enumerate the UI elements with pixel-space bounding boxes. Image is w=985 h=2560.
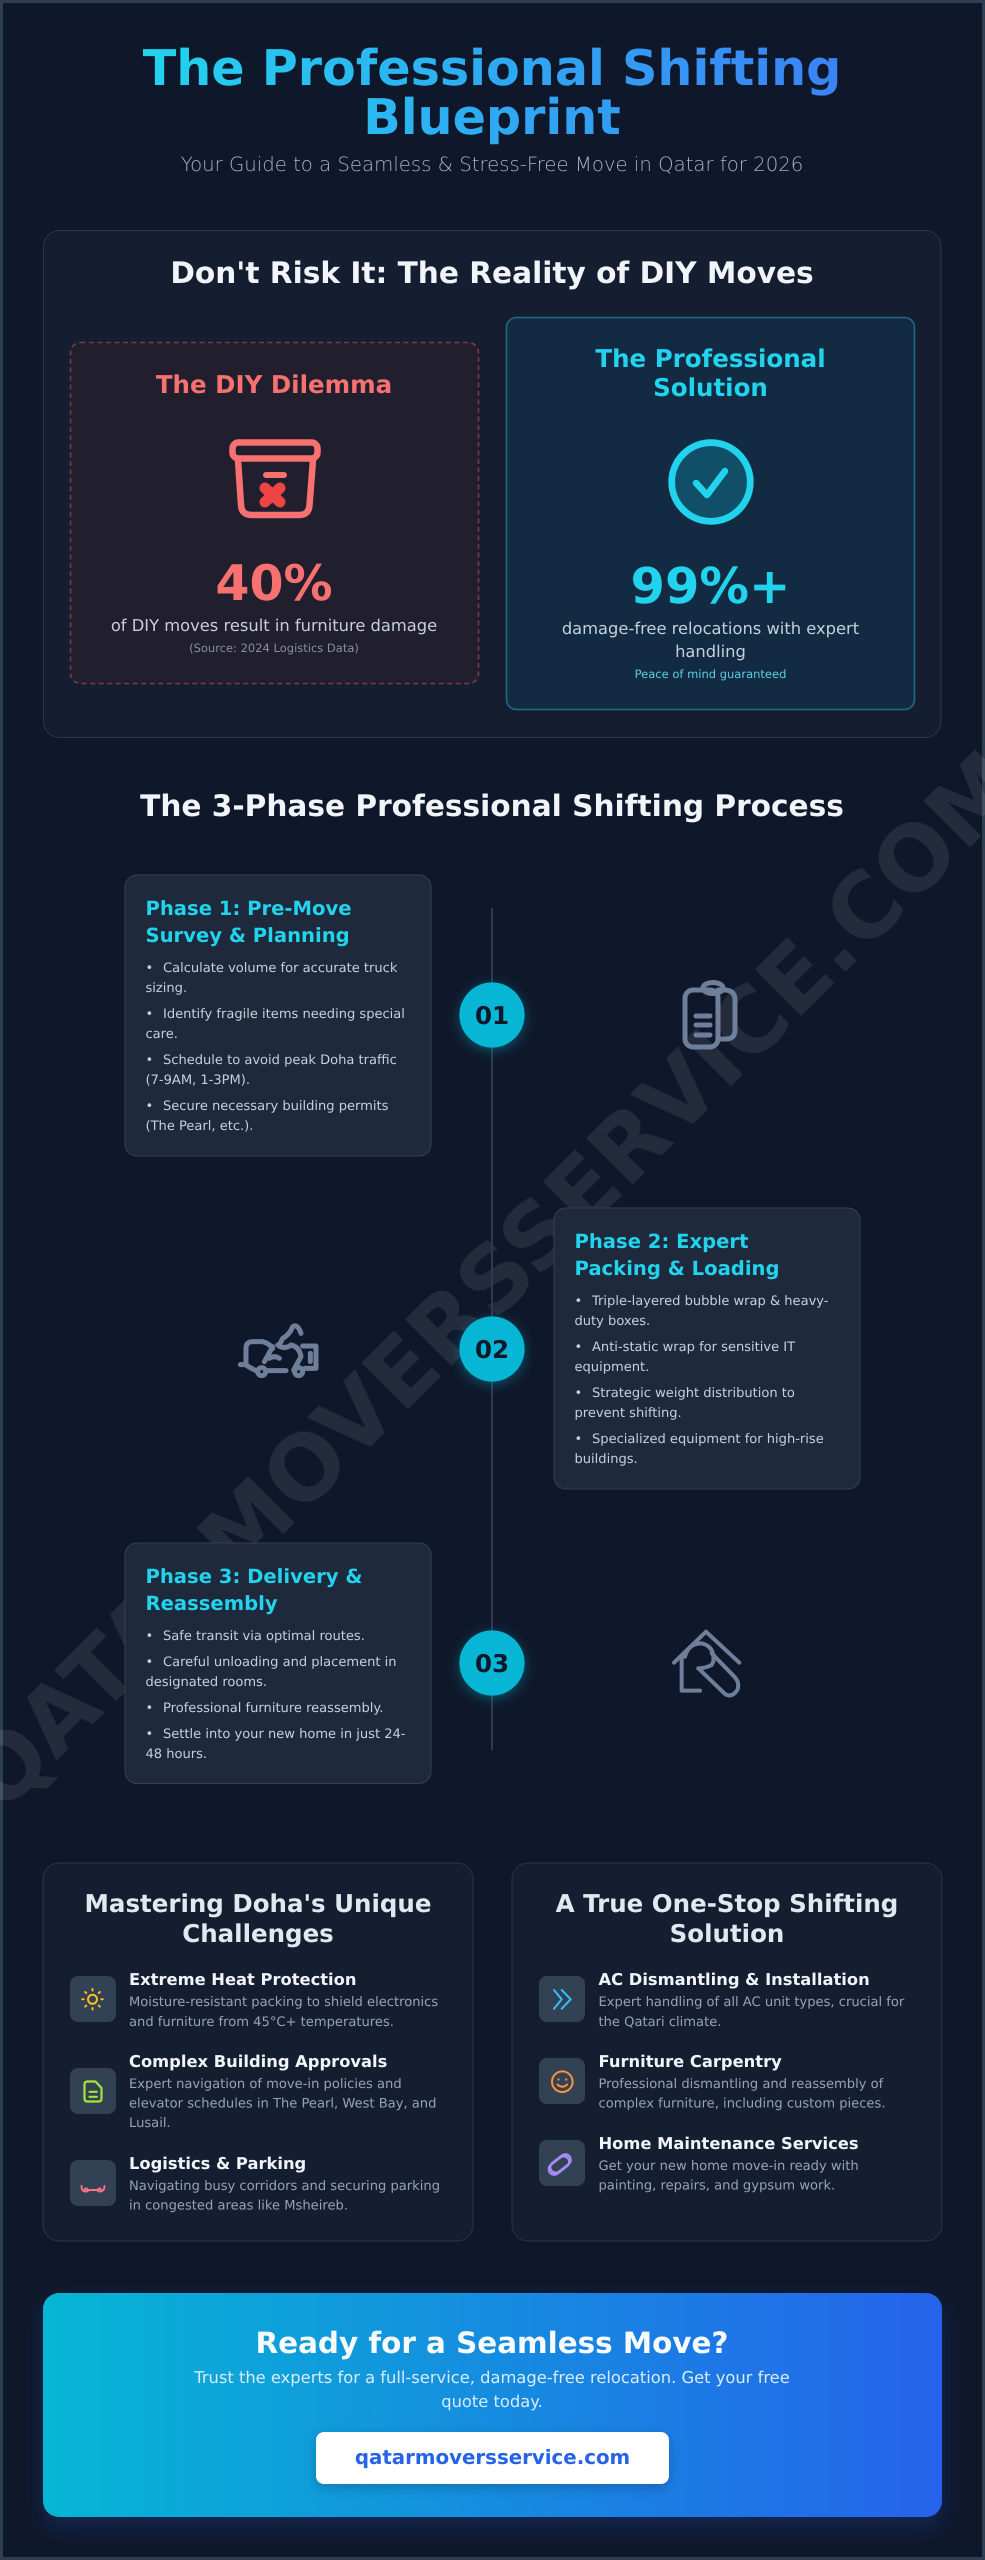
icon: check circle	[672, 443, 750, 521]
heading: challenges: Mastering Doha's Unique	[85, 1889, 431, 1918]
number badge 02	[459, 1316, 525, 1385]
item: furniture carpentry: Furniture Carpentry	[598, 2052, 782, 2071]
heading: one-stop: A True One-Stop Shifting	[556, 1889, 898, 1918]
call to action banner	[43, 2293, 942, 2527]
CTA heading: Ready for a Seamless Move?	[256, 2326, 728, 2360]
DIY heading: The DIY Dilemma	[156, 370, 392, 399]
card: professional solution	[506, 318, 914, 710]
item: heat protection: Extreme Heat Protection	[129, 1970, 356, 1989]
card: phase 1: Identify fragile items needing special	[163, 1007, 405, 1022]
title: Blueprint	[363, 88, 621, 146]
card: phase 3: •	[146, 1629, 153, 1644]
stat: 99%+: 99%+	[631, 557, 790, 615]
item: AC services	[539, 1970, 905, 2030]
card: phase 3: Professional furniture reassembly.	[163, 1701, 383, 1716]
stat description: damage-free relocations with expert	[562, 619, 859, 638]
card: phase 2: Packing & Loading	[574, 1257, 780, 1280]
item: home maintenance: Home Maintenance Services	[598, 2134, 859, 2153]
card: phase 2: duty boxes.	[574, 1314, 650, 1329]
card: phase 3: Reassembly	[146, 1592, 278, 1615]
card: phase 2: Anti-static wrap for sensitive IT	[592, 1340, 795, 1355]
card: phase 1: (The Pearl, etc.).	[146, 1119, 253, 1134]
number badge 01: 01	[475, 1001, 509, 1030]
heading: reality of DIY moves: Don't Risk It: The Reality of DIY Moves	[170, 256, 814, 290]
professional heading: Solution	[653, 373, 768, 402]
stat: 40%: 40%	[215, 555, 333, 612]
heading: challenges: Challenges	[182, 1919, 334, 1948]
card: phase 3: •	[146, 1701, 153, 1716]
card: phase 2: •	[574, 1294, 582, 1309]
card: phase 1: •	[146, 961, 153, 976]
card: phase 3: Careful unloading and placement in	[163, 1655, 397, 1670]
card: phase 1: Calculate volume for accurate truck	[163, 961, 398, 976]
card: phase 2: equipment.	[574, 1360, 649, 1375]
item: AC services: AC Dismantling & Installation	[598, 1970, 870, 1989]
item: furniture carpentry: Professional dismantling and reassembly of	[598, 2077, 884, 2092]
card: phase 3: 48 hours.	[146, 1747, 207, 1762]
header	[143, 39, 841, 176]
card: phase 1: Secure necessary building permits	[163, 1099, 389, 1114]
number badge 03: 03	[475, 1649, 509, 1678]
guarantee note: Peace of mind guaranteed	[635, 667, 786, 681]
panel: Doha challenges	[43, 1863, 473, 2241]
card: phase 3: •	[146, 1727, 153, 1742]
card: phase 1: •	[146, 1099, 153, 1114]
icon: truck	[240, 1326, 316, 1376]
item: logistics and parking: Navigating busy corridors and securing parking	[129, 2179, 440, 2194]
card: phase 3: Safe transit via optimal routes.	[163, 1629, 365, 1644]
phase 3	[125, 1543, 739, 1784]
card: phase 2	[554, 1208, 860, 1489]
item: building approvals: Lusail.	[129, 2116, 171, 2131]
item: building approvals: elevator schedules in The Pearl, West Bay, and	[129, 2097, 436, 2112]
panel: one-stop solution	[512, 1863, 942, 2241]
card: phase 2: Specialized equipment for high-rise	[592, 1432, 824, 1447]
source note: (Source: 2024 Logistics Data)	[189, 641, 359, 655]
number badge 01	[459, 982, 525, 1051]
CTA button: qatarmoversservice.com	[355, 2446, 630, 2469]
phase 1	[125, 875, 735, 1156]
number badge 02: 02	[475, 1335, 509, 1364]
icon: damaged box	[232, 442, 318, 515]
card: phase 2: Strategic weight distribution to	[592, 1386, 795, 1401]
card: phase 1: sizing.	[146, 981, 187, 996]
item: AC services: the Qatari climate.	[598, 2015, 721, 2030]
card: phase 1: (7-9AM, 1-3PM).	[146, 1073, 250, 1088]
title: The Professional Shifting	[143, 39, 841, 97]
card: phase 3	[125, 1543, 431, 1784]
item: heat protection: Moisture-resistant packing to shield electronics	[129, 1995, 438, 2010]
icon: clipboard	[685, 982, 735, 1047]
item: AC services: Expert handling of all AC unit types, crucial for	[598, 1995, 905, 2010]
card: phase 3: •	[146, 1655, 153, 1670]
item: logistics and parking	[70, 2154, 440, 2214]
item: building approvals	[70, 2052, 436, 2131]
phase 2	[240, 1208, 860, 1489]
stat description: handling	[675, 642, 746, 661]
card: phase 2: •	[574, 1386, 582, 1401]
card: phase 2: buildings.	[574, 1452, 638, 1467]
item: logistics and parking: Logistics & Parking	[129, 2154, 306, 2173]
card: DIY dilemma	[70, 342, 478, 684]
card: phase 3: designated rooms.	[146, 1675, 267, 1690]
timeline line	[491, 908, 493, 1750]
item: logistics and parking: in congested areas like Msheireb.	[129, 2199, 348, 2214]
number badge 03	[459, 1630, 525, 1699]
item: building approvals: Complex Building Approvals	[129, 2052, 387, 2071]
item: heat protection	[70, 1970, 438, 2030]
card: phase 1: care.	[146, 1027, 178, 1042]
item: home maintenance: painting, repairs, and gypsum work.	[598, 2179, 835, 2194]
item: home maintenance	[539, 2134, 859, 2194]
card: phase 3: Settle into your new home in just 24-	[163, 1727, 406, 1742]
card: phase 1: •	[146, 1053, 153, 1068]
heading: process: The 3-Phase Professional Shifting Process	[140, 789, 844, 823]
card: phase 2: Phase 2: Expert	[574, 1230, 748, 1253]
card: phase 2: •	[574, 1340, 582, 1355]
CTA text: Trust the experts for a full-service, damage-free relocation. Get your free	[193, 2368, 790, 2387]
professional heading: The Professional	[595, 344, 826, 373]
item: furniture carpentry: complex furniture, including custom pieces.	[598, 2097, 885, 2112]
card: phase 1: Phase 1: Pre-Move	[146, 897, 352, 920]
card: phase 2: •	[574, 1432, 582, 1447]
stat description: of DIY moves result in furniture damage	[111, 616, 437, 635]
card: phase 1: •	[146, 1007, 153, 1022]
CTA text: quote today.	[441, 2392, 543, 2411]
card: phase 1: Schedule to avoid peak Doha traffic	[163, 1053, 397, 1068]
card: phase 2: prevent shifting.	[574, 1406, 682, 1421]
item: home maintenance: Get your new home move-in ready with	[598, 2159, 859, 2174]
card: phase 1	[125, 875, 431, 1156]
subtitle: Your Guide to a Seamless & Stress-Free Move in Qatar for 2026	[181, 153, 803, 176]
card: phase 1: Survey & Planning	[146, 924, 350, 947]
panel: DIY vs professional	[44, 230, 941, 738]
CTA button	[316, 2432, 669, 2488]
icon: home and tool	[674, 1632, 739, 1695]
card: phase 2: Triple-layered bubble wrap & heavy-	[591, 1294, 829, 1309]
heading: one-stop: Solution	[670, 1919, 784, 1948]
item: furniture carpentry	[539, 2052, 885, 2112]
card: phase 3: Phase 3: Delivery &	[146, 1565, 362, 1588]
item: building approvals: Expert navigation of move-in policies and	[129, 2077, 402, 2092]
item: heat protection: and furniture from 45°C+ temperatures.	[129, 2015, 394, 2030]
